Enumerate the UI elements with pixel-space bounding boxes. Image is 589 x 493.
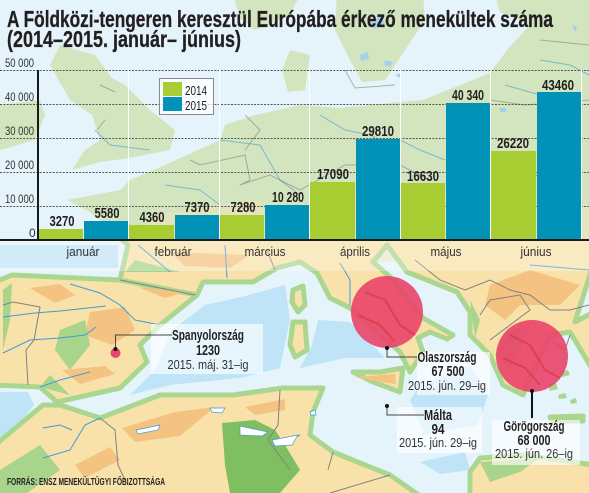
legend: 2014 bbox=[185, 83, 207, 98]
bar value labels: 26220 bbox=[497, 135, 529, 152]
y axis labels: 40 000 bbox=[5, 90, 34, 104]
callout: Malta bbox=[385, 404, 482, 453]
callout: Italy: 67 500 bbox=[432, 363, 464, 380]
lower map land bbox=[0, 241, 589, 493]
y axis labels: 30 000 bbox=[5, 124, 34, 138]
month labels: január bbox=[66, 244, 100, 259]
callout: Malta: 94 bbox=[432, 421, 445, 438]
y axis labels bbox=[5, 56, 36, 240]
bar chart bbox=[0, 56, 589, 259]
callout: Spain: 1230 bbox=[196, 342, 220, 359]
upper map land bbox=[0, 0, 589, 262]
month labels bbox=[66, 244, 552, 259]
y axis labels: 10 000 bbox=[5, 192, 34, 206]
lakes bbox=[136, 408, 316, 446]
month labels: március bbox=[244, 244, 286, 259]
bar value labels: 5580 bbox=[94, 205, 120, 222]
bar value labels: 4360 bbox=[140, 209, 164, 226]
bar value labels: 7280 bbox=[230, 199, 256, 216]
bubble: Greece bbox=[496, 320, 568, 392]
callout: Italy bbox=[385, 346, 490, 395]
y axis labels: 20 000 bbox=[5, 158, 34, 172]
month labels: április bbox=[340, 244, 370, 259]
callout: Malta: 2015. jún. 29–ig bbox=[399, 435, 477, 450]
month labels: június bbox=[520, 244, 552, 259]
callout: Greece bbox=[492, 389, 580, 465]
legend bbox=[160, 78, 214, 114]
y axis labels: 50 000 bbox=[5, 56, 34, 70]
bar value labels: 17090 bbox=[317, 166, 349, 183]
callout: Greece: 68 000 bbox=[518, 432, 550, 449]
bar value labels: 7370 bbox=[184, 199, 210, 216]
bar value labels: 3270 bbox=[50, 213, 74, 230]
month labels: február bbox=[154, 244, 192, 259]
bar value labels: 43460 bbox=[542, 77, 574, 94]
bubble: Spain bbox=[110, 348, 120, 358]
callout: Malta: Málta bbox=[424, 407, 452, 424]
callout: Greece: 2015. jún. 26–ig bbox=[495, 446, 573, 461]
callout: Spain: Spanyolország bbox=[172, 327, 244, 344]
bar value labels: 40 340 bbox=[452, 87, 484, 104]
legend: 2015 bbox=[185, 98, 207, 113]
bar value labels: 10 280 bbox=[272, 189, 304, 206]
title: (2014–2015. január– június) bbox=[7, 26, 241, 52]
month labels: május bbox=[430, 244, 462, 259]
title bbox=[7, 6, 553, 52]
bar value labels: 29810 bbox=[362, 123, 394, 140]
blue bars: 2015 bbox=[84, 92, 581, 239]
callout: Italy: Olaszország bbox=[418, 349, 476, 366]
bar value labels bbox=[50, 77, 574, 230]
source: FORRÁS: ENSZ MENEKÜLTÜGYI FŐBIZOTTSÁGA bbox=[7, 475, 165, 488]
callout: Spain: 2015. máj. 31–ig bbox=[168, 357, 248, 372]
green bars: 2014 bbox=[39, 151, 536, 239]
bubble: Italy bbox=[351, 276, 423, 348]
callout: Spain bbox=[114, 324, 263, 374]
callout: Italy: 2015. jún. 29–ig bbox=[408, 378, 486, 393]
y axis labels: 0 bbox=[29, 226, 36, 240]
bar value labels: 16630 bbox=[407, 168, 439, 185]
axis lines bbox=[0, 70, 589, 241]
